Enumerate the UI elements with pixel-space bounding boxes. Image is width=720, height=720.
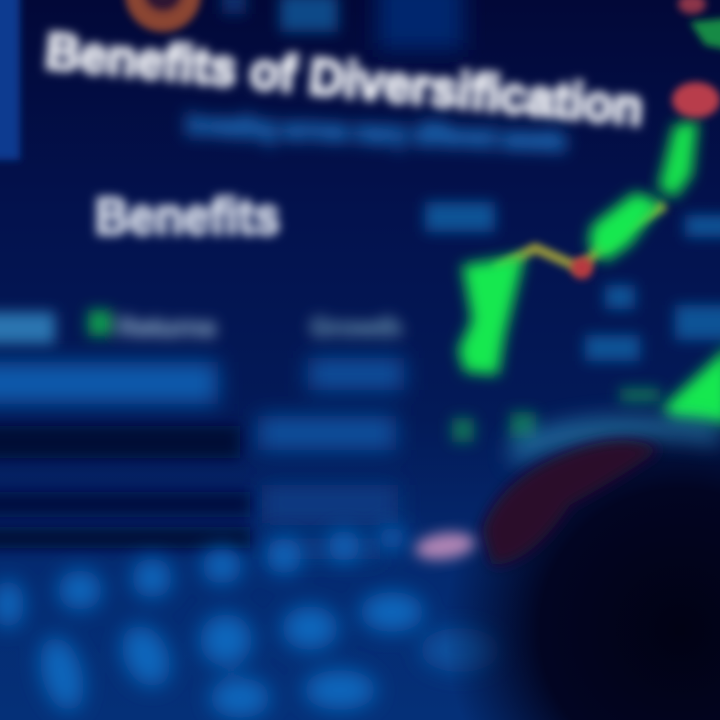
red marker: mid xyxy=(571,257,593,279)
icon: green marker xyxy=(88,310,112,336)
chart line connection xyxy=(495,205,665,270)
hand xyxy=(413,440,660,565)
table dark bands xyxy=(0,426,250,548)
icon: orange logo xyxy=(125,0,201,32)
row label left xyxy=(0,312,55,344)
lower right green shape xyxy=(662,345,720,424)
green candle: second group xyxy=(588,192,662,262)
green corner mark xyxy=(690,18,720,50)
green candle: first group xyxy=(458,255,525,375)
green candle: third group xyxy=(658,120,698,198)
small green markers xyxy=(452,388,660,442)
heading: benefits: Benefits xyxy=(95,188,280,246)
red marker: top xyxy=(672,82,720,118)
green line chart xyxy=(458,0,720,375)
row label middle: Returns xyxy=(118,312,216,342)
hand: arm xyxy=(482,440,660,565)
keyboard xyxy=(0,526,500,718)
chart small blue labels xyxy=(425,202,720,361)
top right panel glow xyxy=(378,0,463,50)
row label right: Growth xyxy=(310,312,402,342)
table bright blue cells xyxy=(0,358,404,560)
hand: fingertip xyxy=(413,529,477,563)
table row labels xyxy=(0,310,402,344)
light reflection above hand xyxy=(510,416,720,465)
top small labels xyxy=(222,0,338,32)
red marker: corner xyxy=(678,0,706,14)
dark corner xyxy=(445,395,720,720)
left edge panel xyxy=(0,0,20,160)
title: Benefits of Diversification xyxy=(43,22,646,137)
